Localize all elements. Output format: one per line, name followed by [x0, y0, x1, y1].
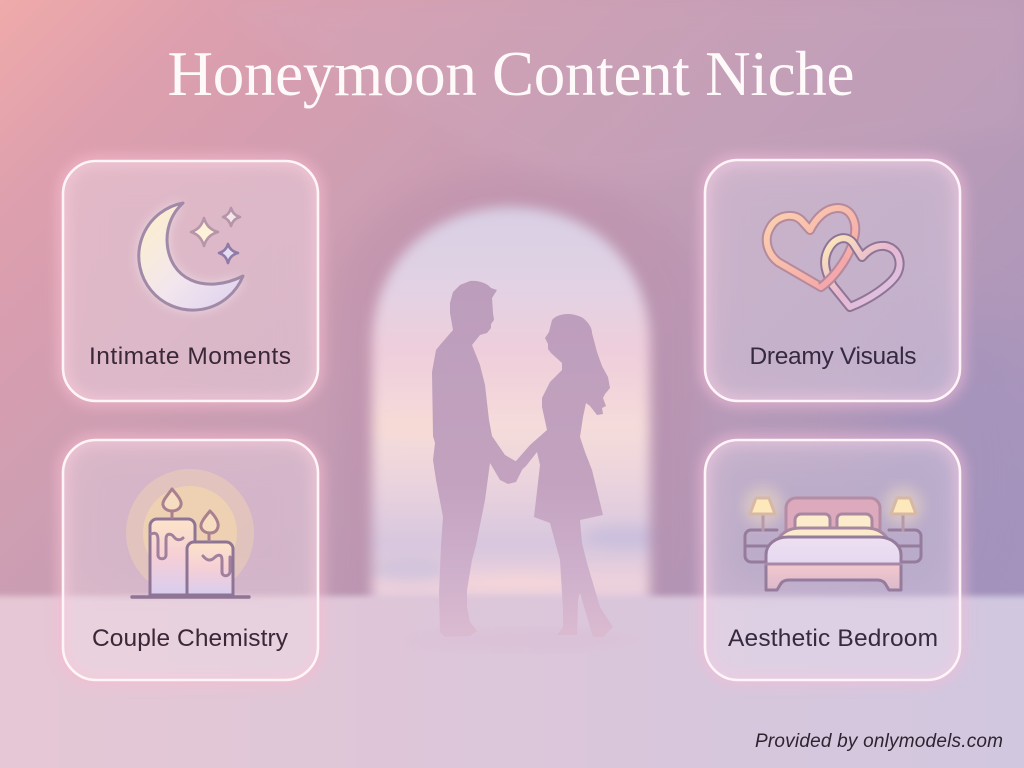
icon: bed with lamps and nightstands	[743, 486, 923, 590]
icon: two lit candles	[126, 469, 254, 597]
footer credit: Provided by onlymodels.com	[755, 731, 1003, 752]
card: Dreamy Visuals	[705, 160, 960, 401]
label: Aesthetic Bedroom: Aesthetic Bedroom	[728, 625, 938, 652]
title: Honeymoon Content Niche	[168, 39, 854, 109]
woman	[500, 314, 613, 637]
icon: crescent moon and stars	[139, 203, 243, 310]
label: Intimate Moments: Intimate Moments	[89, 343, 291, 370]
arch opening with sunset sky	[370, 207, 665, 610]
card: Aesthetic Bedroom	[705, 440, 960, 680]
label: Dreamy Visuals: Dreamy Visuals	[750, 343, 916, 370]
icon: interlocking hearts	[767, 208, 900, 307]
card: Intimate Moments	[63, 161, 318, 401]
label: Couple Chemistry: Couple Chemistry	[92, 625, 289, 652]
card: Couple Chemistry	[63, 440, 318, 680]
man	[432, 281, 523, 637]
couple silhouette	[432, 281, 613, 637]
floor	[0, 596, 1024, 768]
